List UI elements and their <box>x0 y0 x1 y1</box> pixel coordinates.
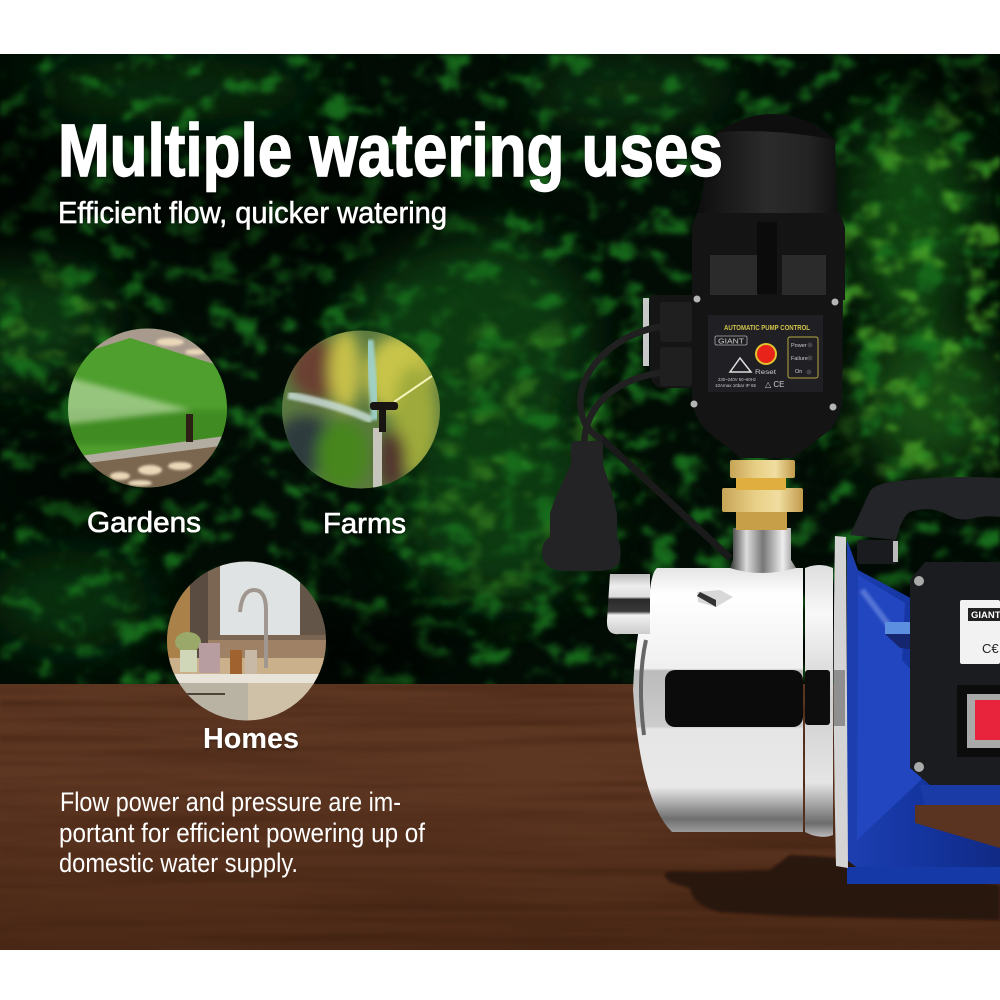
power cables <box>580 327 659 445</box>
controller: ribbed collar <box>692 213 845 300</box>
body text: Flow power and pressure are im- <box>60 787 401 817</box>
image: garden sprinkler <box>68 328 227 488</box>
controller: dome <box>697 114 837 216</box>
background: foliage <box>0 50 1000 690</box>
controller: label panel: GIANT <box>718 338 745 346</box>
image: kitchen sink <box>167 562 326 720</box>
title: Multiple watering uses <box>58 109 723 192</box>
controller: label panel: 230~240V 50~60Hz <box>718 377 757 382</box>
controller: label panel <box>708 315 823 392</box>
controller: label panel: △ CE <box>765 380 784 389</box>
controller: label panel: On <box>795 369 802 375</box>
controller: label panel: Power <box>791 343 807 349</box>
subtitle: Efficient flow, quicker watering <box>58 195 447 230</box>
pump: switch box: GIANT <box>971 610 1000 621</box>
pump shadow <box>665 855 1000 920</box>
product: water pump <box>542 114 1000 884</box>
pump: outlet pipe <box>607 574 650 634</box>
controller: label panel: Failure <box>791 356 808 362</box>
pump: stainless housing <box>633 568 803 832</box>
image: farm irrigation sprinkler <box>282 330 440 488</box>
body text: portant for efficient powering up of <box>59 818 426 848</box>
label: Farms: Farms <box>323 508 406 540</box>
pump: chrome coupling <box>730 528 796 573</box>
controller: connector block <box>643 295 692 388</box>
body text <box>59 787 426 878</box>
pump: switch box <box>910 562 1000 785</box>
pressure controller <box>643 114 845 458</box>
pump: flange and collar <box>805 536 848 868</box>
controller: screws <box>690 296 838 410</box>
label: Gardens: Gardens <box>87 507 201 539</box>
pump: blue motor frame <box>847 540 1000 884</box>
label: Homes: Homes <box>203 723 299 755</box>
brass fitting <box>722 460 803 530</box>
body text: domestic water supply. <box>59 848 298 878</box>
background: wooden table <box>0 684 1000 950</box>
controller: body <box>692 295 843 458</box>
controller: label panel: Reset <box>755 369 776 376</box>
power plug <box>542 441 621 571</box>
controller: label panel: 10Amax 10bar IP 65 <box>715 383 756 388</box>
pump: switch box: C€ <box>982 641 999 656</box>
pump: handle <box>850 477 1000 564</box>
cable to pump <box>600 437 730 558</box>
controller: label panel: AUTOMATIC PUMP CONTROL <box>724 323 810 332</box>
